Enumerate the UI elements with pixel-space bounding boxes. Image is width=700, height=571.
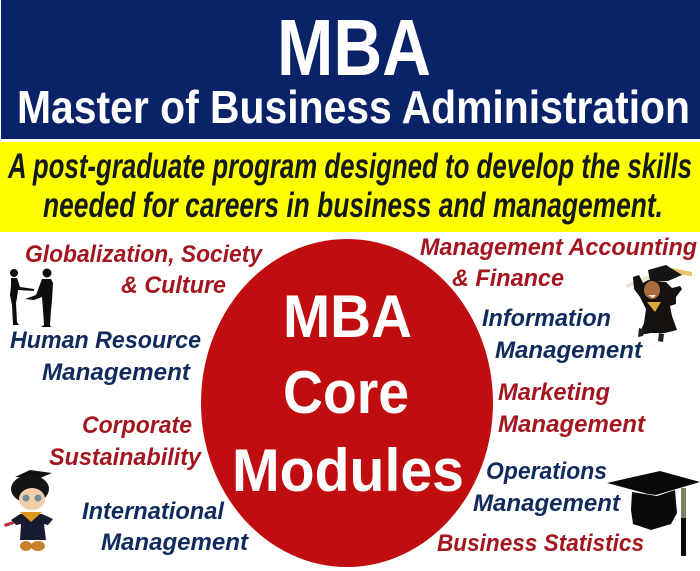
module: Globalization, Society & Culture <box>25 241 264 299</box>
module: Operations Management <box>473 458 621 517</box>
module: International Management: Management <box>101 529 249 556</box>
module: Business Statistics: Business Statistics <box>437 530 644 557</box>
module: Information Management: Management <box>495 337 643 364</box>
module: Human Resource Management: Management <box>42 359 191 386</box>
module: Management Accounting & Finance: Management Accounting <box>420 234 697 261</box>
module: Marketing Management: Management <box>498 411 646 438</box>
module: Human Resource Management <box>10 327 201 386</box>
icon: mortarboard cap <box>607 471 700 556</box>
icon: handshake silhouettes <box>10 268 53 327</box>
module: Management Accounting & Finance: & Finance <box>452 265 564 292</box>
module: Operations Management: Management <box>473 490 621 517</box>
module: Corporate Sustainability <box>49 412 203 471</box>
title: MBA: MBA <box>277 3 431 92</box>
circle text: MBA: MBA <box>283 283 412 350</box>
module: Corporate Sustainability: Corporate <box>82 412 192 439</box>
module: Globalization, Society & Culture: & Culture <box>121 272 226 299</box>
circle text: Core: Core <box>283 359 409 426</box>
title banner <box>1 0 700 139</box>
module: Information Management: Information <box>482 305 611 332</box>
module: Operations Management: Operations <box>486 458 607 485</box>
module: Human Resource Management: Human Resource <box>10 327 201 354</box>
module: Information Management <box>482 305 643 364</box>
module: International Management: International <box>82 498 225 525</box>
central circle <box>201 239 493 567</box>
module: Marketing Management: Marketing <box>498 379 610 406</box>
icon: graduate girl jumping <box>625 265 692 342</box>
module: Marketing Management <box>498 379 646 438</box>
definition banner <box>0 142 700 232</box>
module: Globalization, Society & Culture: Globalization, Society <box>25 241 264 268</box>
module: Corporate Sustainability: Sustainability <box>49 444 203 471</box>
module: Management Accounting & Finance <box>420 234 697 292</box>
module: International Management <box>82 498 249 556</box>
circle text: Modules: Modules <box>232 437 464 504</box>
icon: cartoon graduate boy <box>4 470 53 551</box>
